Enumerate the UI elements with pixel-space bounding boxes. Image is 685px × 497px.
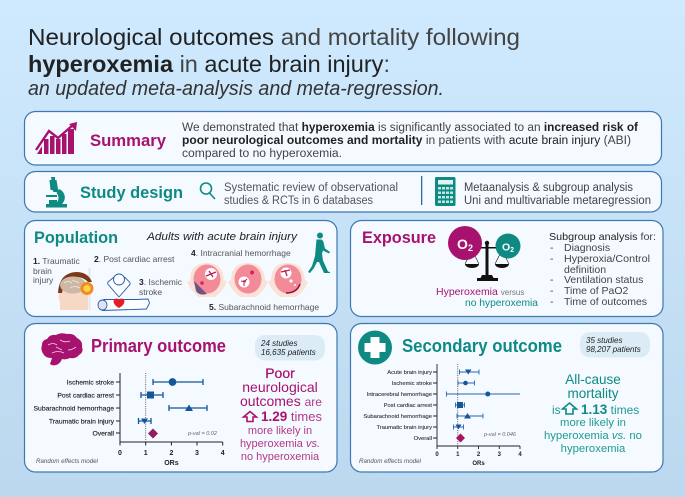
list: subgroup analysis: Diagnosis (564, 242, 610, 254)
text: meta-analysis: Metaanalysis & subgroup analysis (464, 182, 633, 194)
callout: all-cause mortality (544, 372, 642, 455)
forest plot: primary: 2 (169, 450, 173, 457)
icon: scale with O2 circles: 2 (510, 247, 514, 254)
forest plot: secondary: Overall (414, 436, 432, 442)
label: traumatic brain injury (33, 256, 81, 285)
label: post cardiac arrest: 2. Post cardiac arrest (94, 254, 175, 264)
list: subgroup analysis: Time of outcomes (564, 296, 647, 308)
icon: scale with O2 circles (448, 226, 520, 281)
text: meta-analysis: Uni and multivariable metaregression (464, 195, 651, 207)
forest plot: primary: Subarachnoid hemorrhage (34, 406, 114, 412)
panel: summary (24, 112, 662, 165)
forest plot: secondary: 0 (435, 452, 439, 458)
callout: all-cause mortality: hyperoxemia (561, 443, 626, 455)
forest plot: secondary: Subarachnoid hemorrhage (363, 414, 432, 420)
badge: studies (580, 332, 650, 358)
text: systematic review: Systematic review of observational (224, 182, 398, 194)
forest plot: secondary: 4 (518, 452, 522, 458)
forest plot: secondary: Traumatic brain injury (376, 425, 432, 431)
panel: primary outcome (24, 324, 337, 472)
list: subgroup analysis: Ventilation status (564, 274, 643, 286)
forest plot: secondary: ORs (472, 461, 485, 467)
icon: head with brain (58, 268, 94, 310)
forest plot: primary: Post cardiac arrest (57, 392, 114, 400)
heading: study design: Study design (80, 184, 183, 202)
list: subgroup analysis: - (550, 242, 554, 254)
forest plot: secondary: Acute brain injury (387, 370, 432, 376)
callout: all-cause mortality: 1.13 times (581, 402, 639, 417)
forest plot: primary: 1 (144, 450, 148, 457)
label: intracranial hemorrhage: 4. Intracranial hemorrhage (191, 248, 291, 258)
title: Neurological outcomes and mortality following (28, 24, 520, 50)
forest plot: secondary (359, 364, 522, 467)
list: subgroup analysis: - (550, 285, 554, 297)
label: traumatic brain injury: 1. Traumatic (33, 256, 81, 266)
callout: all-cause mortality: hyperoxemia vs. no (544, 430, 642, 442)
forest plot: primary: Random effects model (36, 458, 99, 465)
callout: poor neurological outcomes: 1.29 times (261, 409, 322, 424)
icon: scale with O2 circles: 2 (468, 243, 473, 253)
list: subgroup analysis (549, 231, 656, 308)
forest plot: primary: ORs (164, 460, 179, 467)
forest plot: secondary: Post cardiac arrest (384, 403, 432, 409)
title: an updated meta-analysis and meta-regression. (28, 78, 444, 100)
icon: microscope (46, 177, 67, 208)
icon: scale with O2 circles: O (502, 242, 510, 254)
forest plot: primary: 0 (118, 450, 122, 457)
callout: poor neurological outcomes: outcomes are (240, 393, 322, 409)
badge: studies (255, 335, 325, 360)
list: subgroup analysis: definition (564, 264, 606, 276)
label: ischemic stroke: 3. Ischemic (139, 277, 183, 287)
panel: secondary outcome (350, 324, 663, 472)
summary text: poor neurological outcomes and mortality in patients with acute brain injury (ABI) (182, 135, 631, 147)
text: systematic review: studies & RCTs in 6 databases (224, 195, 373, 207)
forest plot: primary: Overall (92, 430, 114, 438)
forest plot: secondary: 3 (498, 452, 502, 458)
icon: medical cross (358, 330, 392, 364)
forest plot: primary: p-val = 0.02 (187, 431, 217, 437)
subheading: adults: Adults with acute brain injury (146, 231, 299, 243)
title (28, 24, 520, 100)
label: hyperoxemia vs no hyperoxemia (436, 286, 538, 309)
list: subgroup analysis: Time of PaO2 (564, 285, 629, 297)
label: ischemic stroke (139, 277, 183, 297)
label: hyperoxemia vs no hyperoxemia: no hyperoxemia (465, 297, 538, 309)
label: traumatic brain injury: injury (33, 275, 54, 285)
summary text: compared to no hyperoxemia. (182, 148, 342, 160)
callout: all-cause mortality: is (552, 403, 561, 417)
text: systematic review (224, 182, 398, 207)
icon: brain (41, 333, 83, 365)
callout: poor neurological outcomes: more likely in (248, 425, 312, 437)
callout: all-cause mortality: more likely in (560, 417, 626, 429)
list: subgroup analysis: Subgroup analysis for: (549, 231, 656, 243)
panel: population (24, 220, 337, 316)
badge: studies: 35 studies (586, 336, 622, 345)
icon: scale with O2 circles: O (457, 236, 468, 252)
forest plot: primary (34, 373, 225, 467)
callout: poor neurological outcomes (240, 365, 322, 463)
callout: poor neurological outcomes: hyperoxemia vs. (240, 438, 320, 450)
panel: study design (24, 172, 662, 212)
text: meta-analysis (464, 182, 651, 207)
list: subgroup analysis: Hyperoxia/Control (564, 253, 650, 265)
callout: all-cause mortality: mortality (567, 386, 619, 401)
heading: exposure: Exposure (362, 228, 436, 247)
forest plot: primary: 3 (195, 450, 199, 457)
icon: walking person (308, 232, 330, 273)
heading: population: Population (34, 228, 118, 247)
forest plot: primary: Traumatic brain injury (49, 418, 115, 426)
forest plot: secondary: Ischemic stroke (392, 381, 432, 387)
icon: rising chart (36, 122, 77, 154)
forest plot: secondary: 1 (456, 452, 460, 458)
heading: secondary outcome: Secondary outcome (402, 336, 562, 356)
label: traumatic brain injury: brain (33, 266, 52, 276)
icons: hemorrhage brain scans (187, 263, 308, 297)
label: ischemic stroke: stroke (139, 287, 162, 297)
badge: studies: 24 studies (260, 339, 297, 348)
list: subgroup analysis: - (550, 296, 554, 308)
panel: exposure (350, 220, 663, 316)
summary text (182, 122, 638, 160)
list: subgroup analysis: - (550, 274, 554, 286)
forest plot: primary: 4 (221, 450, 225, 457)
heading: primary outcome: Primary outcome (91, 336, 226, 356)
icon: CPR figure (98, 274, 150, 310)
forest plot: secondary: Random effects model (359, 458, 422, 465)
forest plot: secondary: Intracerebral hemorrhage (367, 392, 432, 398)
callout: poor neurological outcomes: neurological (242, 379, 318, 395)
callout: poor neurological outcomes: Poor (265, 365, 295, 381)
list: subgroup analysis: - (550, 253, 554, 265)
badge: studies: 98,207 patients (586, 345, 641, 354)
forest plot: primary: Ischemic stroke (67, 380, 114, 386)
callout: all-cause mortality: All-cause (565, 372, 621, 387)
forest plot: secondary: p-val = 0.046 (483, 432, 517, 438)
title: hyperoxemia in acute brain injury: (28, 51, 390, 77)
callout: poor neurological outcomes: no hyperoxemia (241, 451, 320, 463)
badge: studies: 16,635 patients (261, 348, 316, 357)
heading: summary: Summary (90, 132, 167, 150)
icon: calculator (435, 177, 456, 206)
label: hyperoxemia vs no hyperoxemia: Hyperoxemia versus (436, 286, 524, 298)
label: subarachnoid hemorrhage: 5. Subarachnoid hemorrhage (209, 302, 319, 312)
summary text: We demonstrated that hyperoxemia is significantly associated to an increased risk of (182, 122, 638, 134)
forest plot: secondary: 2 (477, 452, 481, 458)
icon: magnifier (200, 183, 215, 199)
